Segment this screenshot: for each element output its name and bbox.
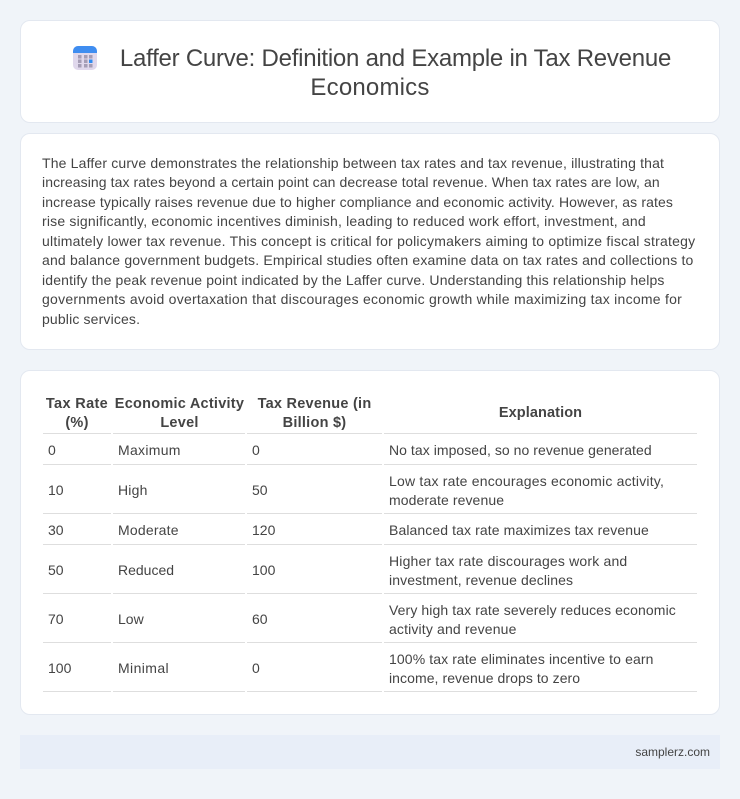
- panel: data table card: [20, 370, 720, 715]
- row: 0: Maximum: [118, 442, 181, 458]
- icon: calendar: [73, 46, 97, 70]
- table header: (%): [65, 415, 89, 431]
- row: 30: Balanced tax rate maximizes tax revenue: [389, 522, 649, 538]
- row: 70: 60: [252, 611, 268, 627]
- row: 100: Minimal: [118, 660, 169, 676]
- row: 30: Moderate: [118, 522, 179, 538]
- row: 10: [48, 473, 664, 508]
- table header: Economic Activity: [115, 396, 244, 412]
- row: 50: investment, revenue declines: [389, 572, 573, 588]
- row: 70: [48, 602, 676, 637]
- title: Laffer Curve: Definition and Example in Tax Revenue: [120, 45, 671, 72]
- panel: intro paragraph card: [20, 133, 720, 350]
- row: 70: Low: [118, 611, 144, 627]
- table header: Billion $): [283, 415, 346, 431]
- row: 100: 100% tax rate eliminates incentive to earn: [389, 651, 654, 667]
- text block: intro paragraph: and balance government budgets. Empirical studies often examine data on tax rates and collections to: [42, 252, 694, 268]
- table header: Tax Rate: [46, 396, 108, 412]
- text block: intro paragraph: The Laffer curve demonstrates the relationship between tax rates and tax revenue, illustrating that: [42, 155, 664, 171]
- footer text: samplerz.com: [635, 745, 710, 759]
- table header: Explanation: [499, 405, 582, 421]
- text block: intro paragraph: identify the peak revenue point indicated by the Laffer curve. Understanding this relationship helps: [42, 272, 665, 288]
- row: 100: [48, 651, 654, 686]
- row: 70: Very high tax rate severely reduces economic: [389, 602, 676, 618]
- row: 30: [48, 522, 649, 538]
- row: 0: No tax imposed, so no revenue generated: [389, 442, 652, 458]
- row: 30: 120: [252, 522, 275, 538]
- row: 70: activity and revenue: [389, 621, 517, 637]
- row: 100: 0: [252, 660, 260, 676]
- row: 0: [48, 442, 652, 458]
- row: 10: moderate revenue: [389, 492, 504, 508]
- text block: intro paragraph: public services.: [42, 311, 140, 327]
- text block: intro paragraph: governments avoid overtaxation that discourages economic growth while maximizing tax income for: [42, 291, 682, 307]
- row: 50: [48, 553, 627, 588]
- row: 0: 0: [48, 442, 56, 458]
- footer bar: [20, 735, 720, 769]
- text block: intro paragraph: ultimately lower tax revenue. This concept is critical for policymakers aiming to optimize fiscal strategy: [42, 233, 695, 249]
- table: tax rate data: [43, 396, 697, 692]
- row: 50: Higher tax rate discourages work and: [389, 553, 627, 569]
- row: 70: 70: [48, 611, 64, 627]
- title: [120, 45, 671, 101]
- title: Economics: [310, 74, 430, 101]
- table header: Level: [160, 415, 199, 431]
- panel: title card: [20, 20, 720, 123]
- text block: intro paragraph: rise significantly, economic incentives diminish, leading to reduced work effort, investment, and: [42, 213, 646, 229]
- row: 10: High: [118, 482, 148, 498]
- table header: [46, 396, 582, 431]
- table header: Tax Revenue (in: [258, 396, 371, 412]
- row: 50: 100: [252, 562, 275, 578]
- row: 50: 50: [48, 562, 64, 578]
- row: 0: 0: [252, 442, 260, 458]
- text block: intro paragraph: increase typically raises revenue due to higher compliance and economic activity. However, as rates: [42, 194, 673, 210]
- row: 100: income, revenue drops to zero: [389, 670, 580, 686]
- text block: intro paragraph: [42, 155, 696, 327]
- row: 10: 10: [48, 482, 64, 498]
- row: 100: 100: [48, 660, 71, 676]
- text block: intro paragraph: increasing tax rates beyond a certain point can decrease total revenue. When tax rates are low, an: [42, 174, 660, 190]
- row: 50: Reduced: [118, 562, 174, 578]
- row: 10: 50: [252, 482, 268, 498]
- row: 30: 30: [48, 522, 64, 538]
- row: 10: Low tax rate encourages economic activity,: [389, 473, 664, 489]
